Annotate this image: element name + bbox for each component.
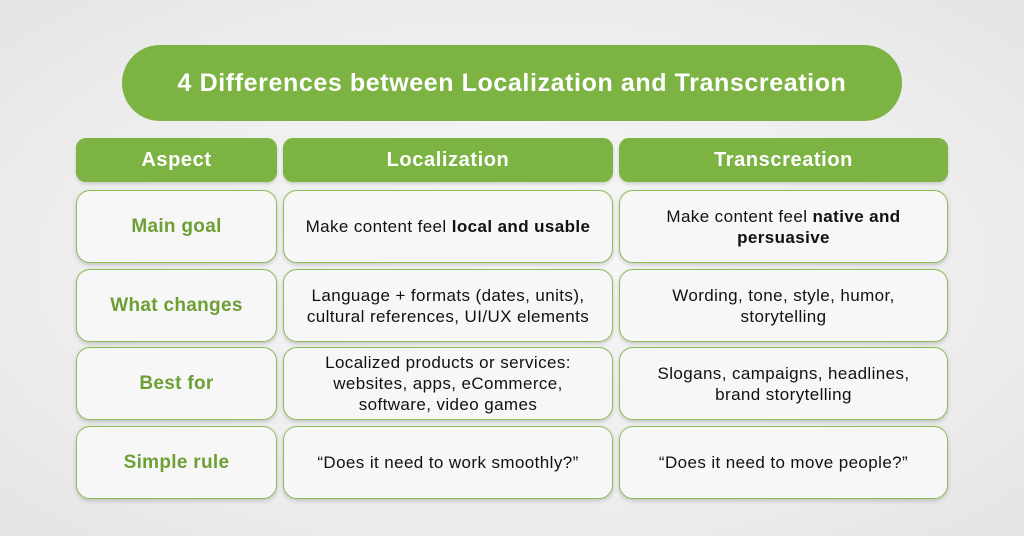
row 2 transcreation: Wording, tone, style, humor, xyxy=(672,286,895,304)
row 4 localization xyxy=(283,426,613,499)
row 2 aspect xyxy=(76,269,277,342)
header: transcreation: Transcreation xyxy=(714,148,853,170)
row 3 transcreation: brand storytelling xyxy=(715,384,852,404)
row 4 transcreation: “Does it need to move people?” xyxy=(659,453,908,472)
row 3 localization: software, video games xyxy=(359,395,537,414)
row 3 localization: Localized products or services: xyxy=(325,353,571,372)
row 2 transcreation: storytelling xyxy=(740,306,827,326)
row 3 localization xyxy=(283,347,613,420)
header: aspect xyxy=(76,138,277,182)
row 3 aspect: Best for xyxy=(139,373,214,394)
row 1 aspect: Main goal xyxy=(131,216,222,237)
row 4 transcreation xyxy=(619,426,948,499)
row 3 transcreation: Slogans, campaigns, headlines, xyxy=(657,364,910,382)
row 2 localization: Language + formats (dates, units), xyxy=(312,286,584,304)
row 1 transcreation: Make content feel native and xyxy=(666,206,901,226)
header: localization xyxy=(283,138,613,182)
row 3 transcreation xyxy=(619,347,948,420)
row 2 localization xyxy=(283,269,613,342)
title: 4 Differences between Localization and Transcreation xyxy=(178,68,846,96)
row 2 aspect: What changes xyxy=(110,295,243,316)
row 2 transcreation xyxy=(619,269,948,342)
header: aspect: Aspect xyxy=(141,148,212,170)
header: localization: Localization xyxy=(387,148,509,170)
row 3 localization: websites, apps, eCommerce, xyxy=(333,374,563,393)
title xyxy=(122,45,902,121)
row 1 aspect xyxy=(76,190,277,263)
row 4 localization: “Does it need to work smoothly?” xyxy=(317,453,579,472)
row 4 aspect: Simple rule xyxy=(124,452,229,473)
header: transcreation xyxy=(619,138,948,182)
row 1 localization: Make content feel local and usable xyxy=(306,217,590,236)
row 1 localization xyxy=(283,190,613,263)
row 1 transcreation: persuasive xyxy=(737,228,830,246)
row 2 localization: cultural references, UI/UX elements xyxy=(307,306,589,326)
row 1 transcreation xyxy=(619,190,948,263)
row 3 aspect xyxy=(76,347,277,420)
row 4 aspect xyxy=(76,426,277,499)
